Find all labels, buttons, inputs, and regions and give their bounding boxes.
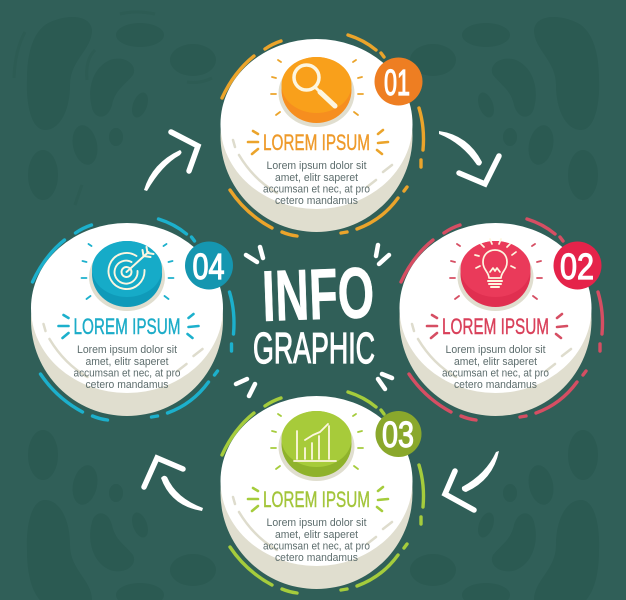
- panel: step 04 blue: [31, 219, 234, 420]
- background pattern: top left blobs: [14, 12, 216, 205]
- panel: step 03 green: [220, 392, 424, 593]
- panel: step 01 orange: [220, 35, 424, 236]
- body text: amet, elitr saperet: [454, 356, 537, 368]
- button: [271, 57, 363, 127]
- title line: INFO: INFO: [261, 253, 376, 337]
- arrow: step 04 to 01: [144, 132, 198, 191]
- background pattern: bottom left blobs: [27, 430, 216, 600]
- title sparks: [236, 245, 392, 396]
- icon: magnifier: [294, 65, 335, 106]
- dashed ring: [222, 35, 424, 236]
- body text: accumsan et nec, at pro: [442, 368, 549, 380]
- title line: GRAPHIC: GRAPHIC: [253, 324, 375, 373]
- icon: light bulb: [475, 239, 516, 287]
- body text: cetero mandamus: [275, 195, 358, 207]
- body text: Lorem ipsum dolor sit: [266, 160, 366, 172]
- number badge 02: 02: [560, 246, 594, 287]
- button: [82, 241, 174, 311]
- background pattern: top right blobs: [410, 17, 599, 200]
- button: [271, 411, 363, 481]
- body text: amet, elitr saperet: [275, 172, 358, 184]
- body text: Lorem ipsum dolor sit: [77, 344, 177, 356]
- body text: amet, elitr saperet: [275, 529, 358, 541]
- dashed ring: [222, 392, 424, 593]
- title: info graphic: [236, 245, 392, 396]
- disc: [220, 39, 412, 232]
- number badge 01: 01: [384, 62, 410, 103]
- icon: target with arrow: [109, 247, 154, 289]
- button: [450, 241, 542, 311]
- heading: LOREM IPSUM: [442, 314, 549, 339]
- heading: LOREM IPSUM: [263, 130, 370, 155]
- number badge 03: 03: [382, 414, 414, 455]
- body text: cetero mandamus: [86, 379, 169, 391]
- icon: rising chart: [294, 424, 336, 461]
- arrow: step 02 to 03: [445, 451, 499, 510]
- disc: [220, 396, 412, 589]
- body text: accumsan et nec, at pro: [74, 368, 180, 380]
- body text: accumsan et nec, at pro: [263, 184, 370, 196]
- body text: [442, 344, 549, 391]
- heading: LOREM IPSUM: [74, 314, 180, 339]
- disc: [31, 223, 223, 416]
- body text: cetero mandamus: [275, 552, 358, 564]
- body text: [74, 344, 180, 391]
- number badge 01: [374, 58, 422, 106]
- dashed ring: [32, 219, 234, 420]
- panel: step 02 red: [400, 219, 602, 420]
- body text: amet, elitr saperet: [86, 356, 168, 368]
- body text: [263, 160, 370, 207]
- dashed ring: [401, 219, 602, 420]
- body text: Lorem ipsum dolor sit: [446, 344, 546, 356]
- body text: cetero mandamus: [454, 379, 537, 391]
- arrow: step 01 to 02: [439, 131, 499, 184]
- background pattern: bottom right blobs: [410, 430, 599, 600]
- arrow: step 03 to 04: [144, 458, 203, 511]
- heading: LOREM IPSUM: [263, 487, 370, 512]
- body text: [263, 517, 370, 564]
- body text: accumsan et nec, at pro: [263, 540, 370, 552]
- number badge 04: 04: [192, 246, 224, 287]
- disc: [400, 223, 592, 416]
- body text: Lorem ipsum dolor sit: [266, 517, 366, 529]
